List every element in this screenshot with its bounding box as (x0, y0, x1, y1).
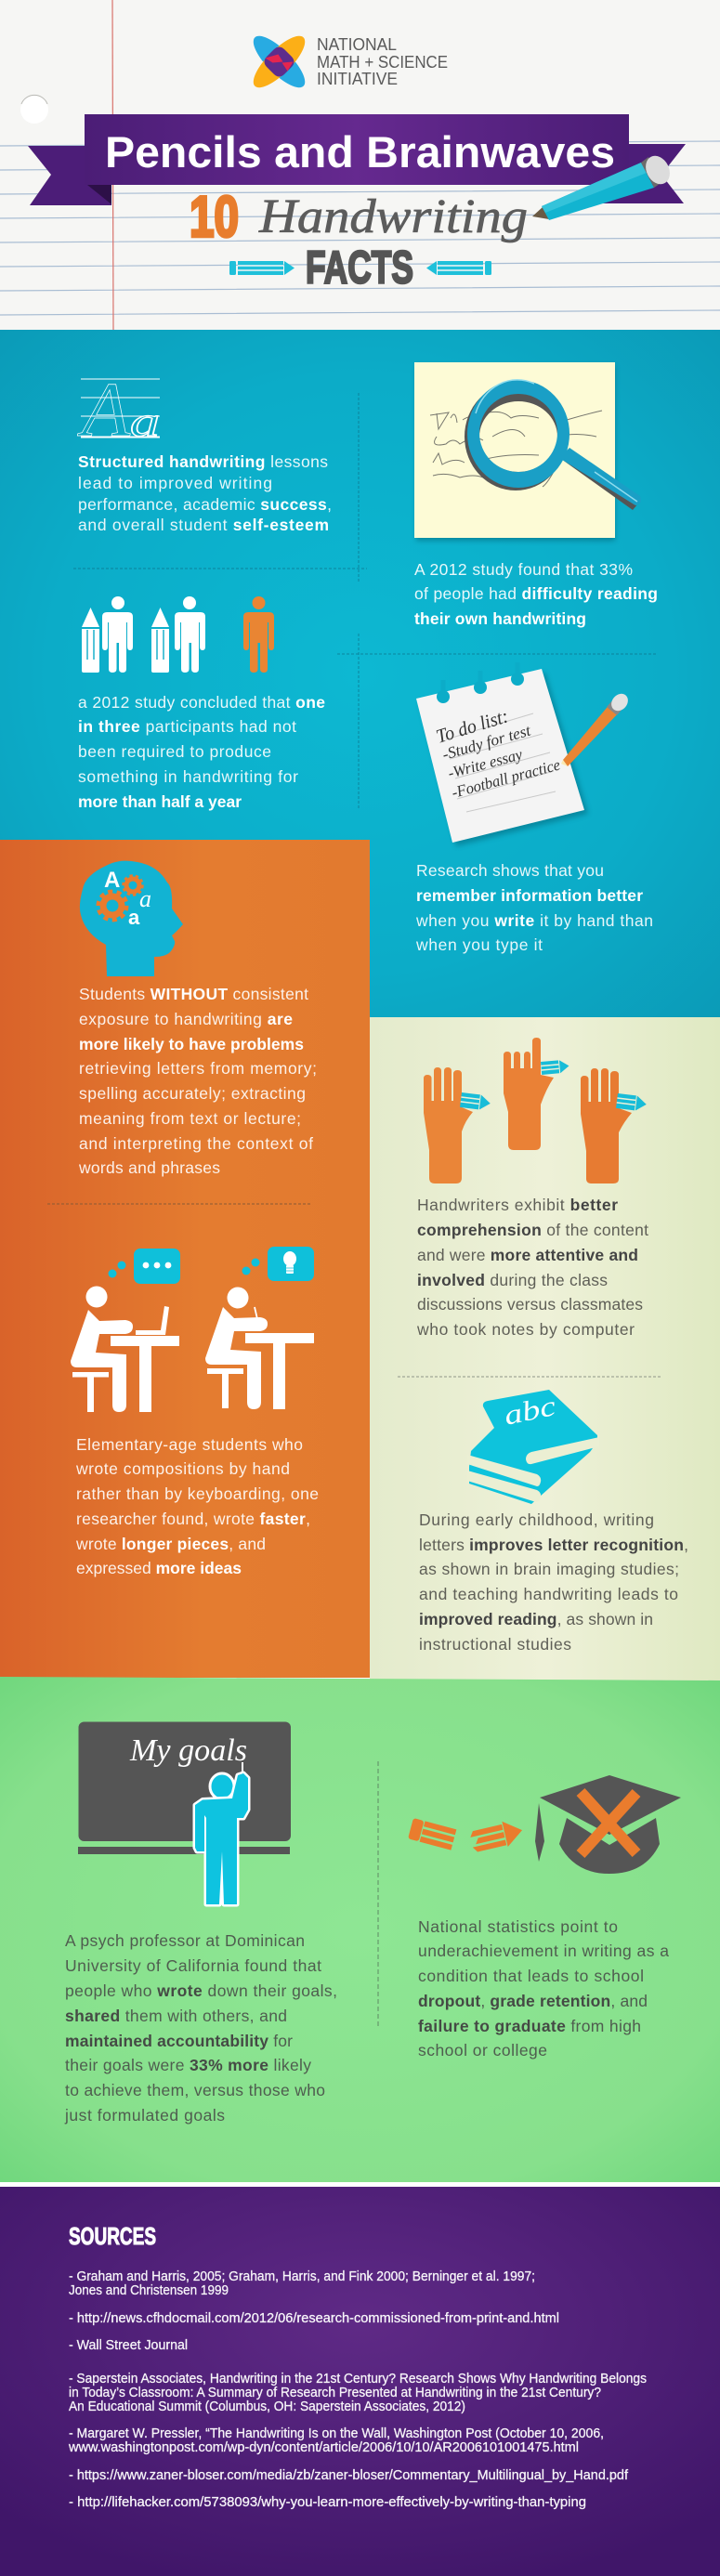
icon: student at laptop (71, 1249, 180, 1412)
text: psych professor: shared them with others, and (65, 2007, 287, 2025)
text: structured handwriting: lead to improved writing (78, 474, 272, 492)
icon: script Aa on guide lines: a (130, 398, 160, 445)
text: one in three: something in handwriting for (78, 767, 298, 786)
icon: chalkboard with figure writing goals: My goals (129, 1733, 247, 1768)
text: 33% difficulty: of people had difficulty reading (414, 584, 658, 603)
icon: to-do list note with pencil (416, 662, 632, 846)
text: elementary-age students: researcher found, wrote faster, (76, 1510, 310, 1528)
icon: to-do list note with pencil: To do list: (433, 704, 511, 748)
icon: chalkboard with figure writing goals (78, 1722, 291, 1904)
text: one in three (78, 693, 325, 811)
text: students without exposure: words and phrases (78, 1158, 220, 1177)
icon: graduation cap crossed out (535, 1775, 681, 1874)
icon: three hands holding pencils (424, 1038, 648, 1183)
text: national statistics (418, 1917, 669, 2059)
text: national statistics: condition that leads to school (418, 1967, 644, 1985)
text: remember better (415, 861, 653, 954)
text: source list: - Saperstein Associates, Handwriting in the 21st Century? Research Shows Why Handwriting Belongs (69, 2372, 647, 2386)
text: better comprehension (416, 1196, 648, 1339)
text: students without exposure: meaning from text or lecture; (79, 1109, 301, 1128)
text: letter recognition: instructional studies (419, 1635, 571, 1654)
text: elementary-age students: rather than by keyboarding, one (76, 1484, 319, 1503)
text: structured handwriting: and overall student self-esteem (78, 516, 329, 534)
panel: cream facts (370, 1017, 720, 1681)
text: national statistics: underachievement in writing as a (418, 1942, 669, 1960)
text: source list: in Today’s Classroom: A Summary of Research Presented at Handwriting in the 21st Century? (69, 2386, 601, 2400)
subtitle: FACTS: FACTS (306, 243, 413, 294)
text: elementary-age students: wrote compositions by hand (75, 1459, 290, 1478)
text: elementary-age students: Elementary-age students who (76, 1435, 303, 1454)
text: better comprehension: discussions versus classmates (417, 1295, 643, 1314)
subtitle number: 10: 10 (190, 186, 239, 249)
text: source list: - Wall Street Journal (69, 2338, 188, 2353)
icon: small pencil left (229, 261, 295, 275)
icon: student writing by hand (205, 1247, 314, 1409)
text: 33% difficulty: A 2012 study found that 33% (414, 560, 633, 579)
text: source list (68, 2269, 647, 2510)
icon: stack of books with abc: abc (502, 1391, 558, 1432)
text: students without exposure: exposure to handwriting are (79, 1010, 293, 1028)
text: national statistics: dropout, grade retention, and (418, 1992, 648, 2010)
text: better comprehension: Handwriters exhibit better (417, 1196, 618, 1214)
text: 33% difficulty (414, 560, 658, 628)
icon: to-do list note with pencil: -Football practice (450, 755, 562, 802)
text: structured handwriting: Structured handwriting lessons (78, 452, 328, 471)
text: better comprehension: and were more attentive and (417, 1246, 638, 1264)
text: psych professor: maintained accountability for (65, 2032, 293, 2050)
text: better comprehension: who took notes by computer (416, 1320, 635, 1339)
text: psych professor: just formulated goals (64, 2106, 225, 2125)
text: psych professor: their goals were 33% more likely (65, 2056, 311, 2074)
subtitle script: Handwriting: Handwriting (258, 190, 528, 243)
icon: punched paper hole (20, 95, 48, 124)
text: students without exposure: retrieving letters from memory; (79, 1059, 317, 1078)
text: one in three: in three participants had not (78, 717, 296, 736)
text: remember better: when you type it (415, 935, 543, 954)
text: psych professor: University of California found that (65, 1956, 321, 1975)
icon: broken orange pencil (408, 1817, 525, 1854)
text: structured handwriting: performance, academic success, (78, 495, 332, 514)
icon: head with gears and letters: a (139, 885, 151, 912)
icon: to-do list note with pencil: -Study for test (440, 721, 534, 764)
text: students without exposure (78, 985, 317, 1177)
logo: National Math + Science Initiative (246, 29, 448, 95)
icon: sticky note with magnifying glass (414, 362, 641, 541)
panel: sources (0, 2187, 720, 2576)
header: lined paper with title (0, 0, 720, 331)
icon: pencils and people pictogram (82, 596, 274, 673)
icon: head with gears and letters: a (128, 906, 140, 929)
text: letter recognition: as shown in brain imaging studies; (419, 1560, 679, 1578)
logo: National Math + Science Initiative: NATIONAL (317, 35, 397, 54)
text: psych professor: people who wrote down their goals, (65, 1981, 337, 2000)
icon: small pencil right (426, 261, 491, 275)
heading: sources: SOURCES (69, 2222, 156, 2250)
text: letter recognition: and teaching handwriting leads to (419, 1585, 678, 1603)
text: one in three: been required to produce (78, 742, 271, 761)
icon: to-do list note with pencil: -Write essay (446, 745, 525, 782)
text: elementary-age students (75, 1435, 319, 1577)
panel: green facts (0, 1677, 720, 2182)
text: source list: An Educational Summit (Columbus, OH: Saperstein Associates, 2012) (69, 2399, 465, 2414)
text: elementary-age students: expressed more ideas (76, 1559, 242, 1577)
text: national statistics: National statistics point to (418, 1917, 618, 1936)
icon: script Aa on guide lines: A (77, 367, 131, 453)
text: national statistics: school or college (418, 2041, 547, 2059)
logo: National Math + Science Initiative: MATH + SCIENCE (317, 53, 448, 72)
text: source list: Jones and Christensen 1999 (69, 2283, 229, 2298)
text: remember better: when you write it by hand than (415, 911, 653, 930)
text: letter recognition (419, 1510, 688, 1654)
text: students without exposure: Students WITHOUT consistent (79, 985, 308, 1003)
panel: teal facts (0, 330, 720, 1017)
text: letter recognition: letters improves letter recognition, (419, 1536, 688, 1554)
text: psych professor: A psych professor at Dominican (65, 1931, 305, 1950)
icon: head with gears and letters: A (104, 868, 120, 893)
text: source list: - https://www.zaner-bloser.com/media/zb/zaner-bloser/Commentary_Multilingual_by_Hand.pdf (69, 2468, 629, 2483)
text: 33% difficulty: their own handwriting (414, 609, 586, 628)
text: letter recognition: improved reading, as shown in (419, 1610, 653, 1628)
text: letter recognition: During early childhood, writing (419, 1510, 654, 1529)
text: remember better: remember information better (416, 886, 643, 905)
text: elementary-age students: wrote longer pieces, and (75, 1535, 266, 1553)
text: better comprehension: comprehension of the content (417, 1221, 648, 1239)
text: psych professor: to achieve them, versus those who (65, 2081, 325, 2099)
icon: stack of books with abc (467, 1390, 599, 1504)
icon: script Aa on guide lines (77, 367, 160, 453)
icon: head with gears and letters (80, 861, 183, 976)
title banner: Pencils and Brainwaves (28, 114, 686, 205)
panel: orange facts (0, 840, 370, 1678)
text: students without exposure: more likely to have problems (79, 1035, 304, 1053)
text: source list: - Graham and Harris, 2005; Graham, Harris, and Fink 2000; Berninger et al. 1997; (69, 2269, 535, 2284)
text: students without exposure: spelling accurately; extracting (79, 1084, 306, 1103)
icon: large teal pencil (532, 151, 674, 220)
text: source list: www.washingtonpost.com/wp-dyn/content/article/2006/10/10/AR2006101001475.html (68, 2440, 579, 2455)
text: structured handwriting (78, 452, 332, 534)
title banner: Pencils and Brainwaves: Pencils and Brainwaves (105, 127, 615, 177)
text: source list: - Margaret W. Pressler, “The Handwriting Is on the Wall, Washington Post (October 10, 2006, (69, 2426, 604, 2441)
text: national statistics: failure to graduate from high (418, 2017, 641, 2035)
text: source list: - http://news.cfhdocmail.com/2012/06/research-commissioned-from-print-and.html (69, 2311, 559, 2326)
text: one in three: more than half a year (78, 792, 242, 811)
text: one in three: a 2012 study concluded that one (78, 693, 325, 712)
text: better comprehension: involved during the class (417, 1271, 608, 1289)
text: remember better: Research shows that you (416, 861, 604, 880)
text: psych professor (64, 1931, 337, 2125)
logo: National Math + Science Initiative: INITIATIVE (317, 70, 398, 88)
text: source list: - http://lifehacker.com/5738093/why-you-learn-more-effectively-by-writing-than-typing (69, 2495, 586, 2510)
text: students without exposure: and interpreting the context of (79, 1134, 313, 1153)
